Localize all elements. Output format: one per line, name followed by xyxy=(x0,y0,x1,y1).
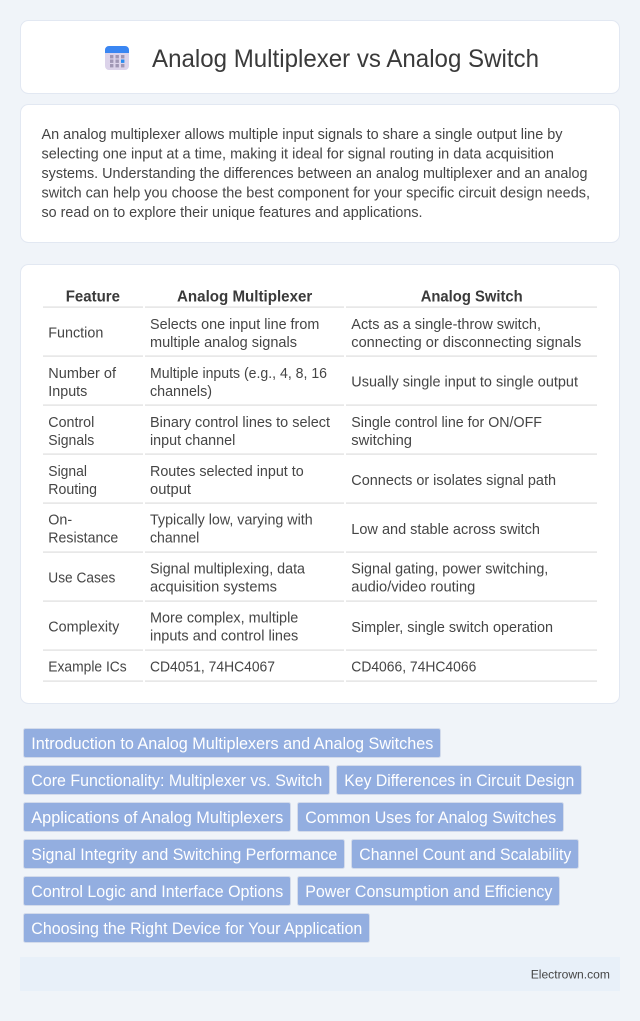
row: on-resistance: channel xyxy=(150,530,199,546)
row: control signals: switching xyxy=(351,433,412,449)
row: complexity: inputs and control lines xyxy=(150,628,298,644)
row: number of inputs: Multiple inputs (e.g., 4, 8, 16 xyxy=(150,366,327,382)
row: on-resistance xyxy=(48,512,540,546)
row: complexity: More complex, multiple xyxy=(150,610,298,626)
row: signal routing xyxy=(48,464,556,498)
text block: introduction: systems. Understanding the differences between an analog multiplexer and an analog xyxy=(42,166,588,182)
row: control signals: Single control line for ON/OFF xyxy=(351,415,542,431)
tag: channel count: Channel Count and Scalability xyxy=(359,846,572,864)
row: on-resistance: Typically low, varying with xyxy=(150,512,313,528)
row: function: connecting or disconnecting signals xyxy=(351,335,581,351)
row: use cases: Signal gating, power switching, xyxy=(351,561,548,577)
tag: core functionality: Core Functionality: Multiplexer vs. Switch xyxy=(31,772,322,790)
row: use cases xyxy=(48,561,548,595)
tag: choosing the right device xyxy=(24,914,370,942)
row: use cases: acquisition systems xyxy=(150,579,277,595)
text block: introduction: selecting one input at a time, making it ideal for signal routing in data acquisition xyxy=(42,146,554,162)
tag: introduction xyxy=(24,728,440,758)
row: signal routing: Routes selected input to xyxy=(150,464,304,480)
row: control signals: Signals xyxy=(48,433,94,449)
tag: signal integrity: Signal Integrity and Switching Performance xyxy=(31,846,337,864)
row: on-resistance: On- xyxy=(48,512,72,528)
row: signal routing: Signal xyxy=(48,464,87,480)
row: complexity xyxy=(48,610,553,644)
row: control signals: input channel xyxy=(150,433,235,449)
row: function: Function xyxy=(48,326,103,342)
row: on-resistance: Resistance xyxy=(48,530,118,546)
row: use cases: Signal multiplexing, data xyxy=(150,561,305,577)
table header: Analog Switch xyxy=(421,289,523,306)
row: number of inputs: channels) xyxy=(150,384,212,400)
title: Analog Multiplexer vs Analog Switch xyxy=(152,46,539,73)
tag: core functionality xyxy=(24,766,330,794)
tag: key differences: Key Differences in Circuit Design xyxy=(344,772,574,790)
footer credit: Electrown.com xyxy=(531,967,610,981)
tag: choosing the right device: Choosing the Right Device for Your Application xyxy=(31,920,362,938)
row: example ICs: Example ICs xyxy=(48,660,127,676)
tag: channel count xyxy=(352,840,578,868)
tag: key differences xyxy=(336,766,582,794)
footer xyxy=(20,957,620,991)
row: function xyxy=(48,317,581,351)
topic tags xyxy=(24,728,582,942)
tag: signal integrity xyxy=(24,840,344,868)
row: number of inputs: Usually single input to single output xyxy=(351,375,578,391)
row: example ICs: CD4066, 74HC4066 xyxy=(351,660,476,676)
panel: comparison table xyxy=(20,264,620,704)
row: use cases: audio/video routing xyxy=(351,579,475,595)
row: control signals xyxy=(48,415,542,449)
text block: introduction xyxy=(42,127,590,221)
row: signal routing: output xyxy=(150,482,191,498)
row: complexity: Simpler, single switch operation xyxy=(351,620,553,636)
panel: introduction xyxy=(20,104,620,242)
tag: common uses: Common Uses for Analog Switches xyxy=(305,809,556,827)
row: signal routing: Routing xyxy=(48,482,97,498)
panel: header xyxy=(20,20,620,94)
tag: applications xyxy=(24,802,290,832)
text block: introduction: switch can help you choose the best component for your specific circuit design needs, xyxy=(42,185,590,201)
tag: control logic xyxy=(24,876,290,906)
tag: control logic: Control Logic and Interface Options xyxy=(31,883,283,901)
row: number of inputs: Inputs xyxy=(48,384,87,400)
row: use cases: Use Cases xyxy=(48,571,115,587)
icon: calendar grid xyxy=(105,46,129,70)
tag: applications: Applications of Analog Multiplexers xyxy=(31,809,283,827)
tag: power consumption xyxy=(298,876,560,906)
table header: Analog Multiplexer xyxy=(177,289,312,306)
table header: Feature xyxy=(66,289,120,306)
row: number of inputs: Number of xyxy=(48,366,116,382)
row: control signals: Binary control lines to select xyxy=(150,415,330,431)
table header xyxy=(66,289,523,306)
row: signal routing: Connects or isolates signal path xyxy=(351,473,556,489)
text block: introduction: so read on to explore their unique features and applications. xyxy=(42,205,422,221)
tag: introduction: Introduction to Analog Multiplexers and Analog Switches xyxy=(31,735,433,753)
row: function: multiple analog signals xyxy=(150,335,297,351)
row: example ICs: CD4051, 74HC4067 xyxy=(150,660,275,676)
row: complexity: Complexity xyxy=(48,620,120,636)
row: function: Selects one input line from xyxy=(150,317,319,333)
row: function: Acts as a single-throw switch, xyxy=(351,317,541,333)
row: number of inputs xyxy=(48,366,578,400)
tag: common uses xyxy=(298,802,564,832)
tag: power consumption: Power Consumption and Efficiency xyxy=(305,883,553,901)
row: control signals: Control xyxy=(48,415,94,431)
text block: introduction: An analog multiplexer allows multiple input signals to share a single output line by xyxy=(42,127,563,143)
row: on-resistance: Low and stable across switch xyxy=(351,522,540,538)
row: example ICs xyxy=(48,660,476,676)
